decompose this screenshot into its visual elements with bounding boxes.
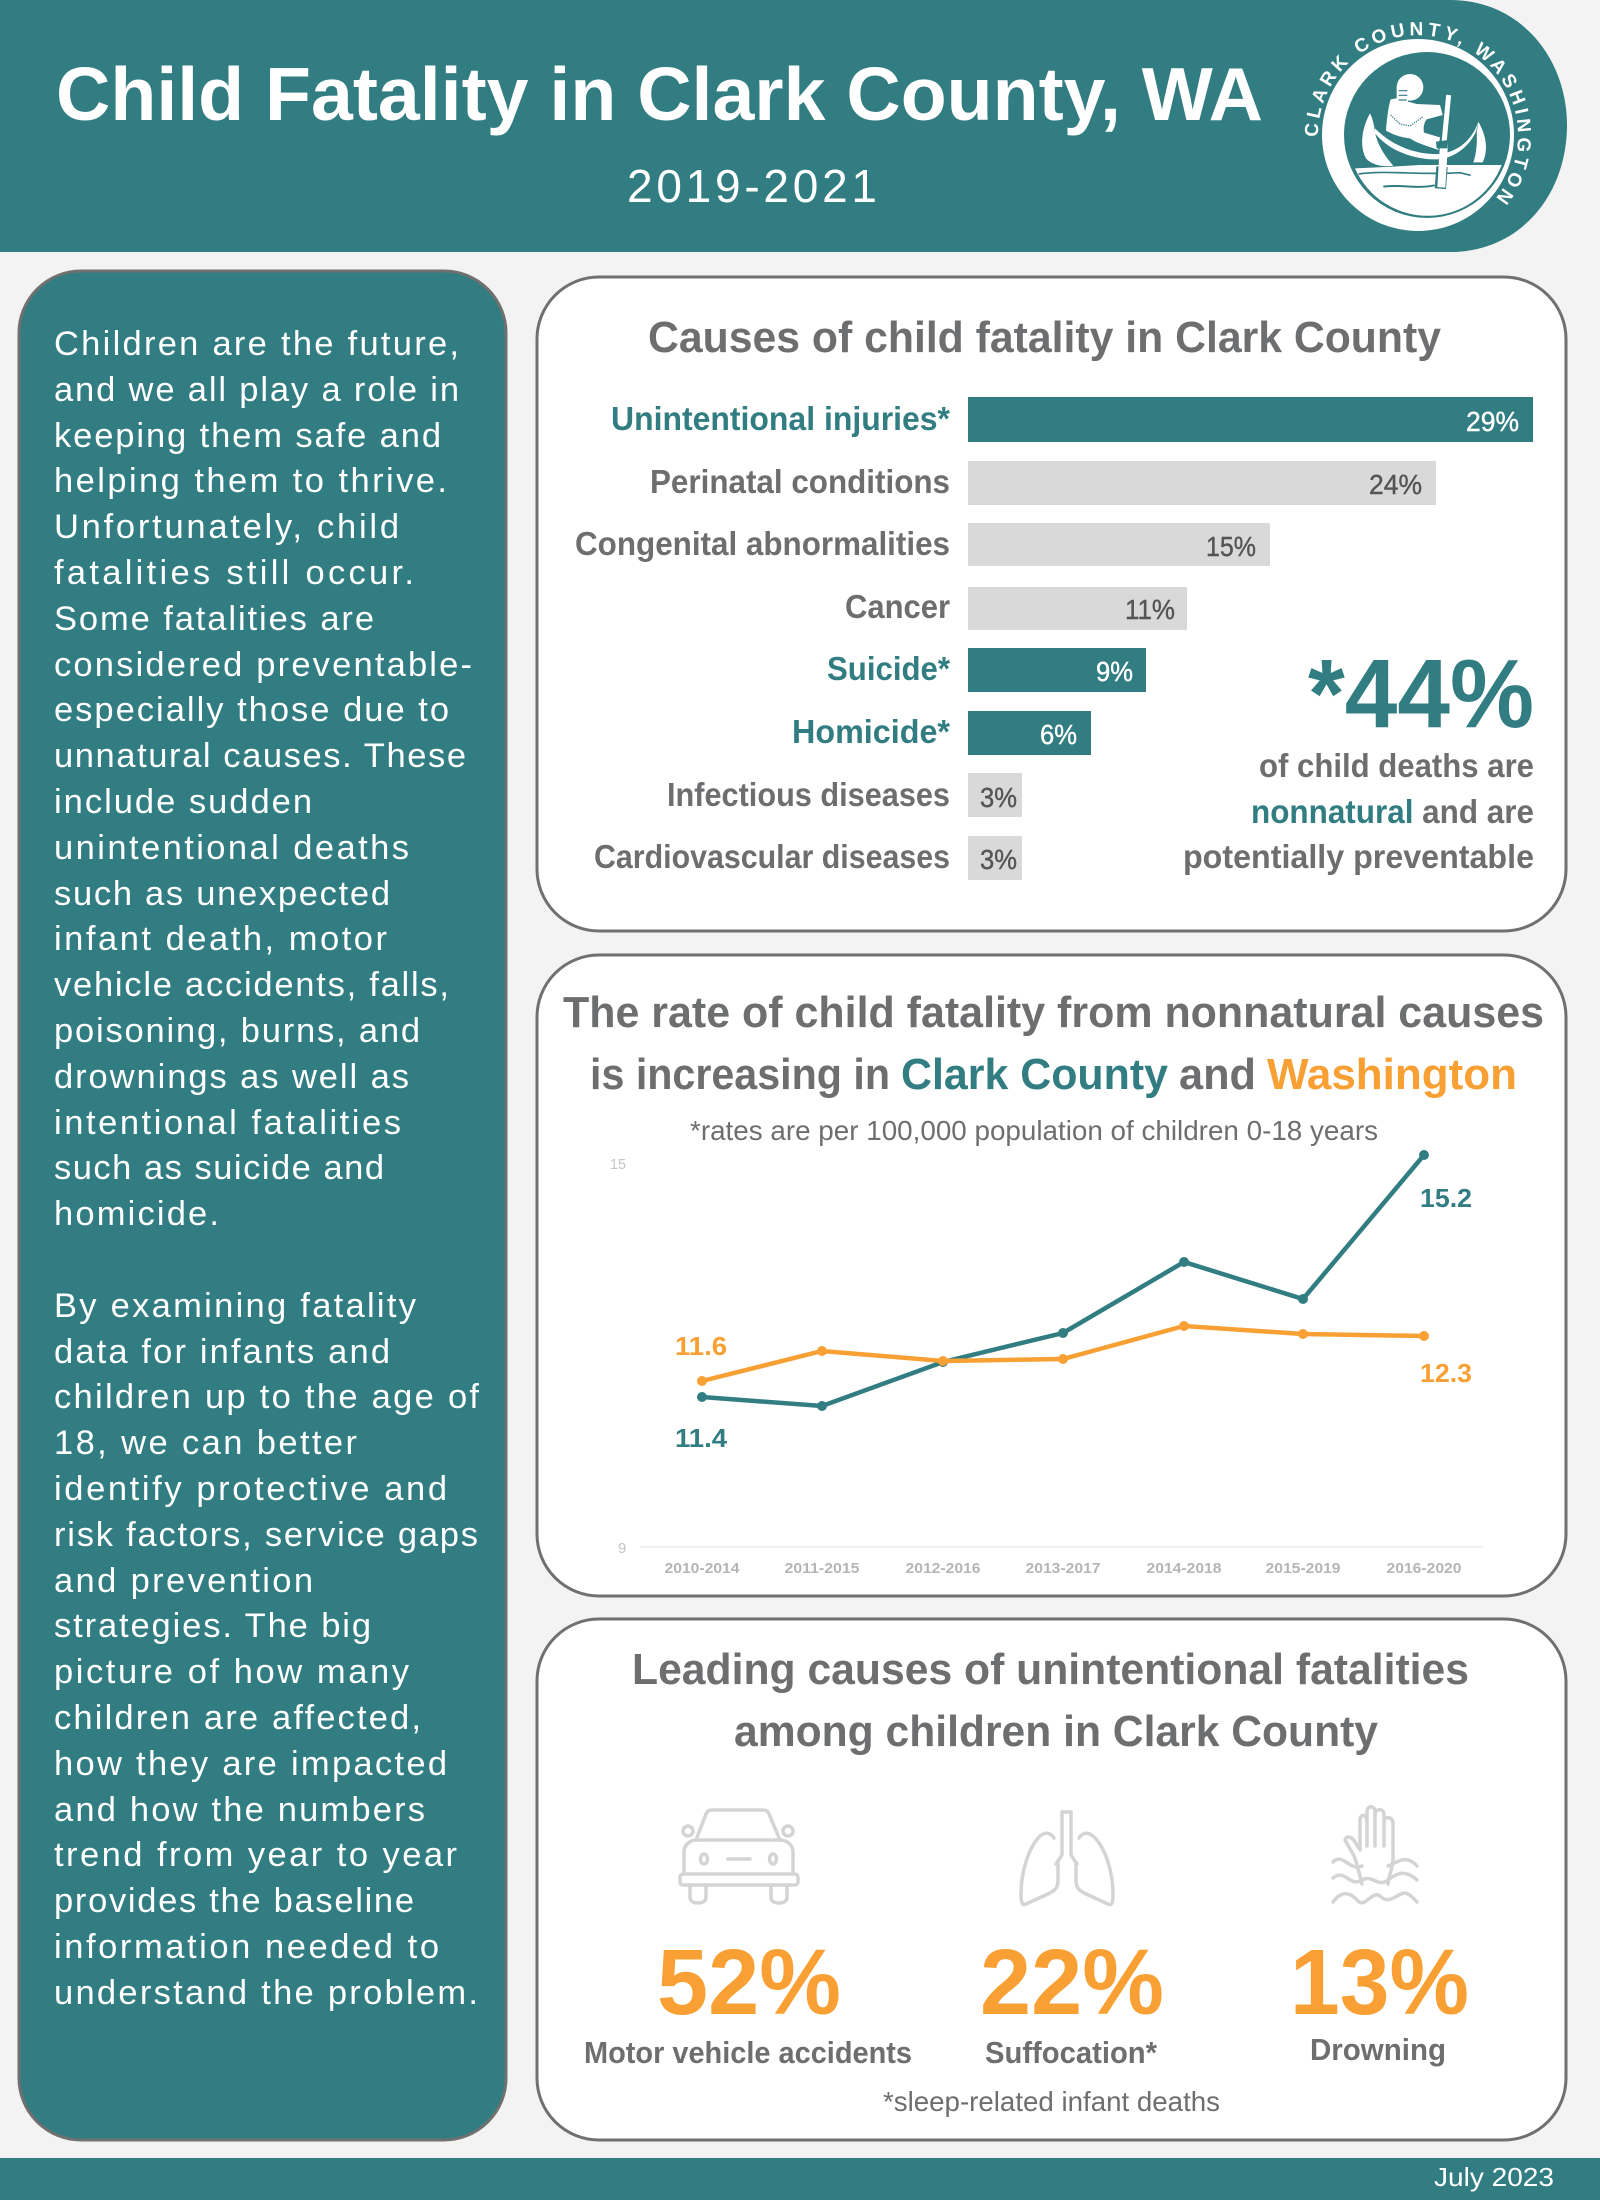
text block: introduction: information needed to [54, 1928, 439, 1966]
stat: suffocation: 22% [980, 1930, 1164, 2034]
text block: introduction: how they are impacted [54, 1745, 447, 1783]
header banner [0, 0, 1567, 252]
callout: 44 percent nonnatural: nonnatural and are [1251, 793, 1534, 830]
line: Washington [697, 1321, 1429, 1386]
data labels: 11.4 [675, 1423, 728, 1453]
line chart: fatality rates: 2016-2020 [1386, 1560, 1462, 1577]
line chart: fatality rates: 2014-2018 [1146, 1560, 1222, 1577]
bar chart: causes: Homicide* [792, 713, 950, 750]
text block: introduction: vehicle accidents, falls, [54, 966, 449, 1004]
text block: introduction: and we all play a role in [54, 371, 459, 409]
bar chart: causes: 24% [1369, 469, 1422, 500]
heading: rate trend: and [1179, 1050, 1256, 1099]
footer bar [0, 2158, 1600, 2200]
panel: nonnatural rate trend [537, 955, 1566, 1596]
callout: 44 percent nonnatural [1183, 639, 1534, 875]
text block: introduction: and how the numbers [54, 1791, 425, 1829]
text block: introduction: By examining fatality [54, 1287, 417, 1325]
line chart: fatality rates [610, 1150, 1483, 1577]
heading: rate trend: Clark County [901, 1050, 1169, 1099]
text block: introduction: Children are the future, [54, 325, 459, 363]
text block: introduction: identify protective and [54, 1470, 447, 1508]
text block: introduction: Unfortunately, child [54, 508, 399, 546]
text block: introduction: trend from year to year [54, 1836, 457, 1874]
text block: introduction: especially those due to [54, 691, 449, 729]
stat: motor vehicle accidents: Motor vehicle accidents [584, 2035, 912, 2070]
line chart: fatality rates: 15 [610, 1156, 626, 1173]
text block: introduction: strategies. The big [54, 1607, 371, 1645]
data labels [675, 1183, 1472, 1453]
icon: drowning hand [1333, 1807, 1417, 1903]
icon: lungs [1021, 1812, 1113, 1905]
callout: 44 percent nonnatural: of child deaths are [1259, 747, 1534, 784]
text block: introduction: unintentional deaths [54, 829, 409, 867]
text block: introduction: provides the baseline [54, 1882, 414, 1920]
heading: causes: Causes of child fatality in Clark County [648, 313, 1442, 362]
text block: introduction: Some fatalities are [54, 600, 374, 638]
text block: introduction: keeping them safe and [54, 417, 441, 455]
stat: suffocation: Suffocation* [985, 2035, 1158, 2070]
text block: introduction: children up to the age of [54, 1378, 479, 1416]
heading: leading causes [632, 1645, 1469, 1756]
icon: car [680, 1810, 798, 1903]
bar chart: causes: Congenital abnormalities [575, 525, 950, 562]
subtitle: years: 2019-2021 [627, 160, 877, 212]
icon: Clark County seal: CLARK COUNTY, WASHINGTON [1304, 22, 1531, 205]
panel: causes of child fatality [537, 277, 1566, 931]
stat: motor vehicle accidents: 52% [657, 1930, 841, 2034]
text block: introduction: children are affected, [54, 1699, 421, 1737]
bar chart: causes: 9% [1096, 656, 1133, 687]
title: Child Fatality in Clark County, WA [56, 52, 1263, 136]
data labels: 11.6 [675, 1331, 727, 1361]
heading: rate trend: The rate of child fatality from nonnatural causes [563, 988, 1544, 1037]
line chart: fatality rates: 2013-2017 [1026, 1560, 1100, 1577]
bar chart: causes: Unintentional injuries* [611, 400, 950, 437]
stat: drowning: 13% [1290, 1930, 1469, 2034]
bar chart: causes: 3% [980, 782, 1017, 813]
text block: introduction: such as suicide and [54, 1149, 384, 1187]
line chart: fatality rates: 2010-2014 [664, 1560, 740, 1577]
data labels: 12.3 [1420, 1358, 1472, 1388]
callout: 44 percent nonnatural: *44% [1308, 639, 1534, 748]
text block: introduction: include sudden [54, 783, 312, 821]
footnote: sleep-related: *sleep-related infant deaths [883, 2086, 1220, 2117]
text block: introduction: understand the problem. [54, 1974, 478, 2012]
text block: introduction [54, 325, 479, 2012]
heading: rate trend: Washington [1267, 1050, 1517, 1099]
bar chart: causes: 11% [1125, 594, 1175, 625]
data labels: 15.2 [1420, 1183, 1472, 1213]
heading: leading causes: among children in Clark County [734, 1707, 1379, 1756]
bar chart: causes: Cardiovascular diseases [594, 838, 950, 875]
line chart: fatality rates: 9 [618, 1540, 626, 1557]
bar chart: causes: Perinatal conditions [650, 463, 950, 500]
stat: motor vehicle accidents [584, 1930, 912, 2070]
text block: introduction: data for infants and [54, 1333, 390, 1371]
heading: leading causes: Leading causes of unintentional fatalities [632, 1645, 1469, 1694]
text block: introduction: considered preventable- [54, 646, 472, 684]
line chart: fatality rates: 2015-2019 [1266, 1560, 1340, 1577]
heading: rate trend: is increasing in [590, 1050, 890, 1099]
text block: introduction: homicide. [54, 1195, 219, 1233]
bar chart: causes: Infectious diseases [667, 776, 950, 813]
bar chart: causes: Cancer [845, 588, 950, 625]
note: rate units: *rates are per 100,000 population of children 0-18 years [690, 1115, 1378, 1146]
line: Clark County [697, 1150, 1429, 1411]
bar chart: causes: 6% [1040, 719, 1077, 750]
bar chart: causes [575, 397, 1533, 880]
text block: introduction: risk factors, service gaps [54, 1516, 478, 1554]
heading: rate trend [563, 988, 1544, 1099]
bar chart: causes: 3% [980, 844, 1017, 875]
text block: introduction: and prevention [54, 1562, 313, 1600]
text block: introduction: fatalities still occur. [54, 554, 414, 592]
panel: introduction text [19, 271, 506, 2140]
bar chart: causes: 29% [1466, 406, 1519, 437]
panel: leading unintentional causes [537, 1619, 1566, 2140]
callout: 44 percent nonnatural: potentially preventable [1183, 838, 1534, 875]
bar chart: causes: 15% [1206, 531, 1256, 562]
text block: introduction: poisoning, burns, and [54, 1012, 420, 1050]
stat: drowning: Drowning [1310, 2032, 1446, 2067]
text block: introduction: unnatural causes. These [54, 737, 466, 775]
text block: introduction: such as unexpected [54, 875, 390, 913]
bar chart: causes: Suicide* [827, 650, 950, 687]
footer date: July 2023 [1434, 2162, 1554, 2192]
text block: introduction: drownings as well as [54, 1058, 409, 1096]
line chart: fatality rates: 2012-2016 [906, 1560, 980, 1577]
text block: introduction: intentional fatalities [54, 1104, 401, 1142]
text block: introduction: 18, we can better [54, 1424, 357, 1462]
line chart: fatality rates: 2011-2015 [784, 1560, 860, 1577]
text block: introduction: helping them to thrive. [54, 462, 447, 500]
text block: introduction: infant death, motor [54, 920, 387, 958]
text block: introduction: picture of how many [54, 1653, 410, 1691]
